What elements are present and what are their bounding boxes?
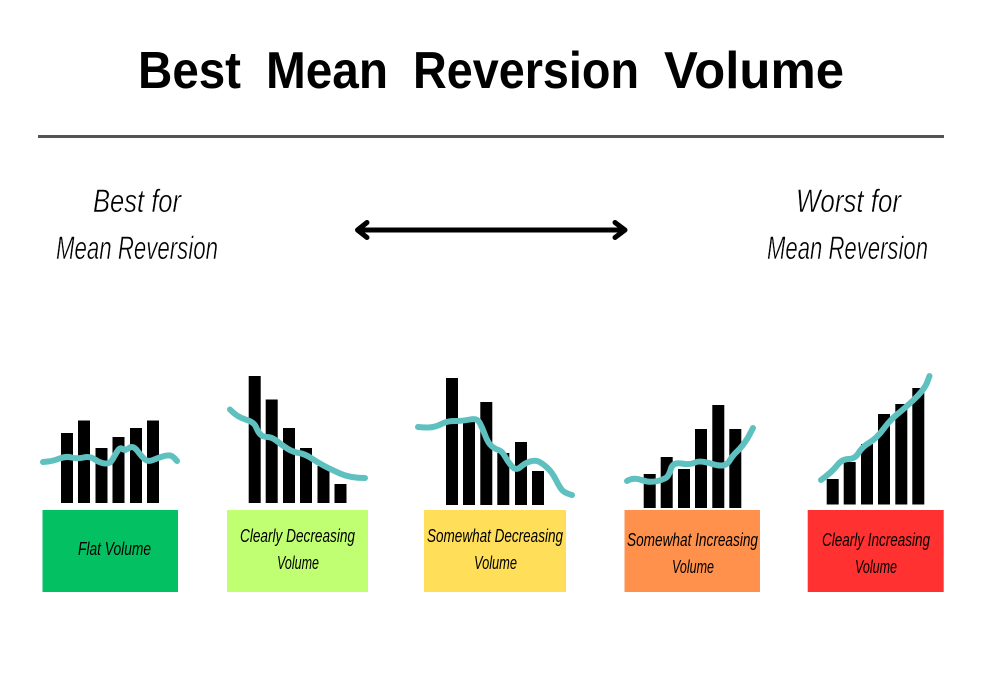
label box: clearly increasing: Volume xyxy=(855,557,897,577)
text: worst for mean reversion: Mean Reversion xyxy=(767,230,928,266)
label box: somewhat decreasing: Somewhat Decreasing xyxy=(427,526,563,546)
bar chart: somewhat increasing xyxy=(644,405,741,508)
panel: flat volume xyxy=(42,420,178,592)
label box: clearly decreasing xyxy=(227,510,368,592)
label box: somewhat decreasing xyxy=(424,510,566,592)
text: worst for mean reversion: Worst for xyxy=(796,183,902,219)
trend line: flat xyxy=(43,447,177,464)
trend line: somewhat increasing xyxy=(627,428,753,482)
label box: somewhat increasing: Volume xyxy=(672,557,714,577)
panel: somewhat increasing volume xyxy=(624,405,760,592)
label box: clearly decreasing: Volume xyxy=(277,553,319,573)
arrow: two-headed spectrum xyxy=(358,222,625,238)
bar chart: clearly decreasing xyxy=(249,376,346,503)
trend line: clearly decreasing xyxy=(230,410,365,478)
title: Best xyxy=(138,42,241,100)
label box: clearly increasing: Clearly Increasing xyxy=(822,530,930,550)
title xyxy=(138,42,844,100)
label box: clearly increasing xyxy=(808,510,944,592)
label box: clearly decreasing: Clearly Decreasing xyxy=(240,526,355,546)
title: Mean xyxy=(266,42,388,100)
title: Reversion xyxy=(413,42,639,100)
bar chart: flat volume xyxy=(61,420,159,503)
panel: somewhat decreasing volume xyxy=(418,378,572,592)
trend line: clearly increasing xyxy=(821,376,930,480)
text: best for mean reversion xyxy=(56,183,218,266)
label box: somewhat increasing xyxy=(624,510,760,592)
panel: clearly decreasing volume xyxy=(227,376,368,592)
text: worst for mean reversion xyxy=(767,183,928,266)
panel: clearly increasing volume xyxy=(808,376,944,592)
bar chart: clearly increasing xyxy=(827,388,924,504)
text: best for mean reversion: Best for xyxy=(93,183,182,219)
label box: flat volume: Flat Volume xyxy=(78,539,151,559)
label box: somewhat increasing: Somewhat Increasing xyxy=(627,530,758,550)
label box: somewhat decreasing: Volume xyxy=(474,553,517,573)
label box: flat volume xyxy=(42,510,178,592)
bar chart: somewhat decreasing xyxy=(446,378,544,505)
trend line: somewhat decreasing xyxy=(418,419,572,495)
title: Volume xyxy=(664,42,844,100)
text: best for mean reversion: Mean Reversion xyxy=(56,230,218,266)
